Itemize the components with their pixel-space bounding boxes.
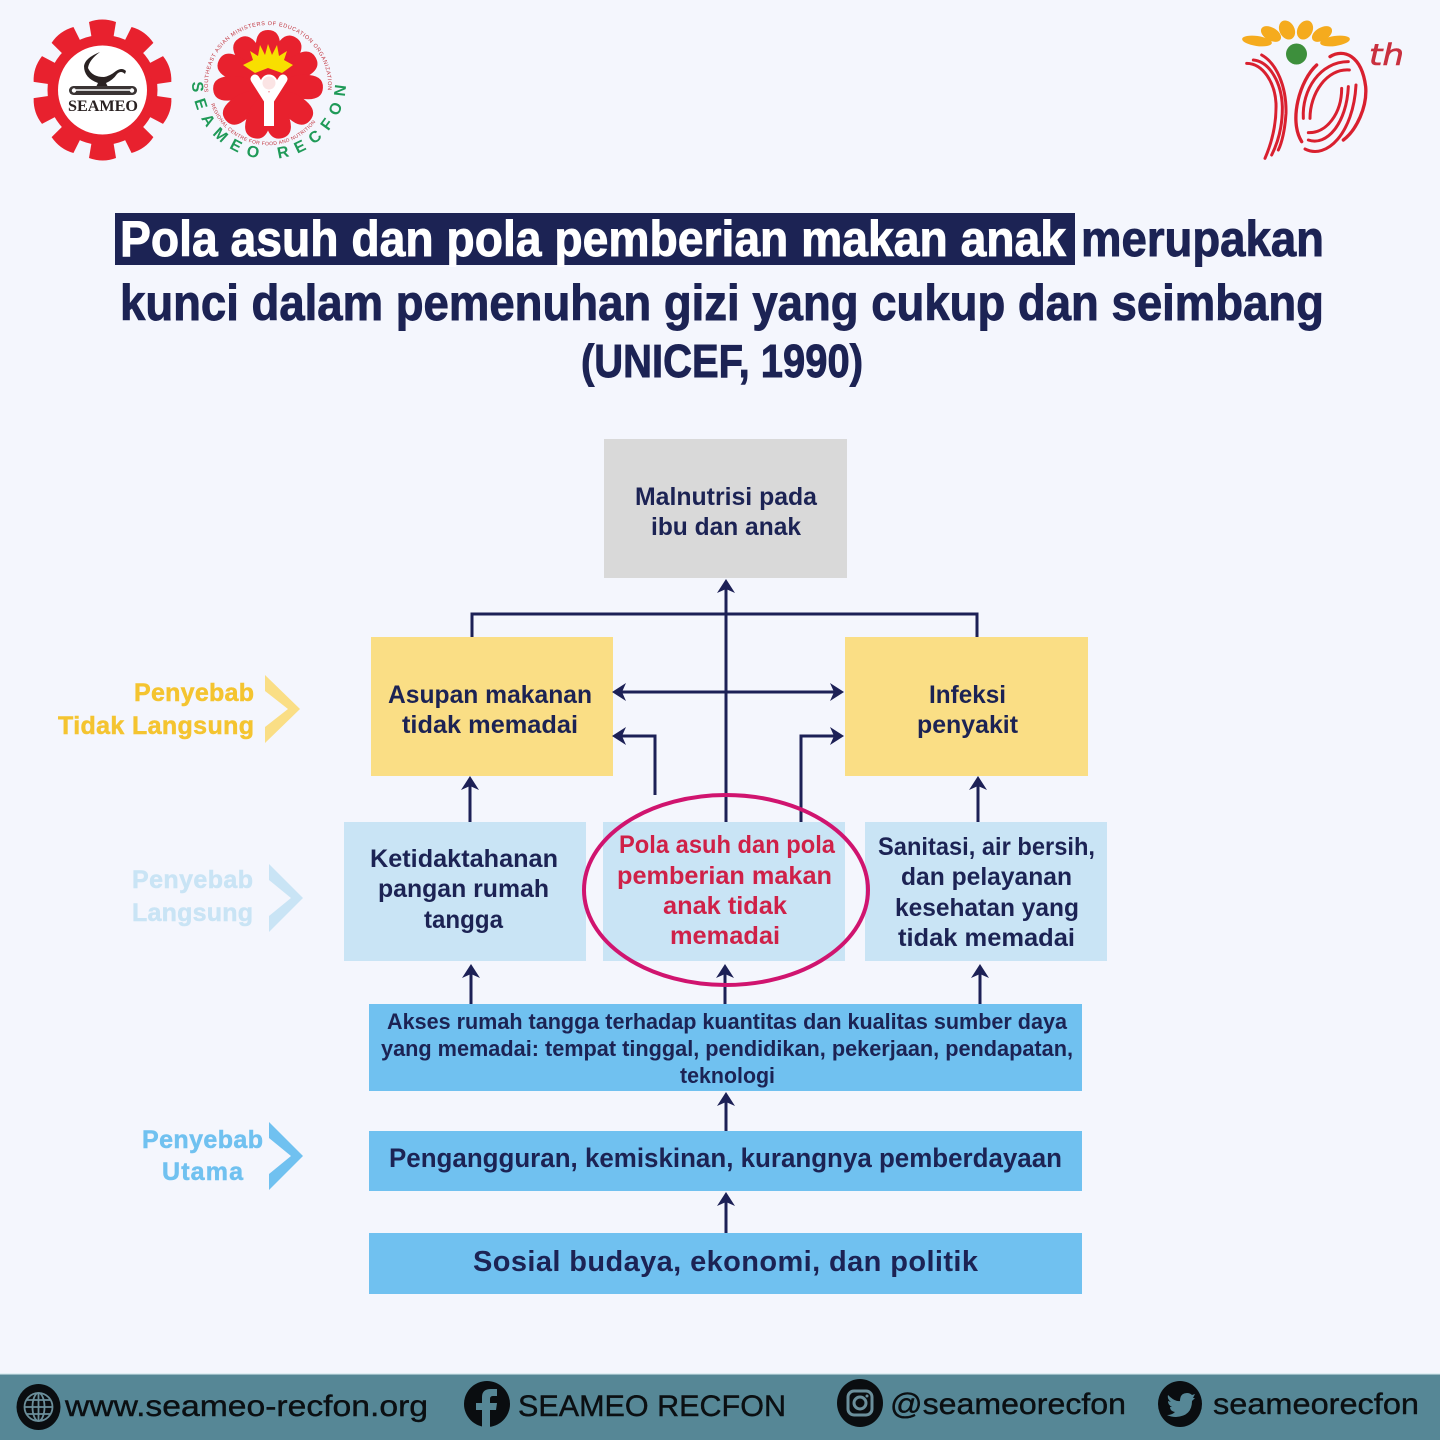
box: unemployment and poverty (369, 1131, 1082, 1191)
box: sanitation: dan pelayanan (901, 863, 1072, 891)
box: parenting and feeding (603, 822, 845, 961)
icon: globe (16, 1384, 60, 1430)
highlight ellipse (584, 795, 868, 985)
box: access to resources: yang memadai: tempat tinggal, pendidikan, pekerjaan, pendapatan, (381, 1036, 1073, 1061)
icon: instagram (837, 1379, 883, 1427)
title: merupakan (1081, 211, 1324, 267)
box: access to resources: Akses rumah tangga terhadap kuantitas dan kualitas sumber daya (387, 1009, 1068, 1034)
label: direct cause: Langsung (132, 899, 253, 927)
icon: twitter (1158, 1381, 1202, 1427)
label: indirect cause: Penyebab (134, 679, 254, 707)
footer bar: seameorecfon (1213, 1388, 1419, 1421)
footer bar: www.seameo-recfon.org (64, 1390, 428, 1423)
box: malnutrition: ibu dan anak (651, 513, 801, 541)
box: socio-cultural, economic, political (369, 1233, 1082, 1294)
box: unemployment and poverty: Pengangguran, kemiskinan, kurangnya pemberdayaan (389, 1143, 1062, 1173)
box: infection: penyakit (917, 711, 1019, 739)
box: household food insecurity (344, 822, 586, 961)
box: inadequate food intake (371, 637, 613, 776)
icon: facebook (464, 1381, 510, 1427)
title: kunci dalam pemenuhan gizi yang cukup dan seimbang (120, 275, 1324, 331)
logo: SEAMEO RECFON flower: SOUTHEAST ASIAN MINISTERS OF EDUCATION ORGANIZATION (204, 21, 332, 92)
logo: SEAMEO RECFON flower: SEAMEO RECFON (192, 82, 346, 158)
box: infection: Infeksi (929, 681, 1006, 709)
title: Pola asuh dan pola pemberian makan anak (120, 211, 1066, 267)
footer bar (0, 1373, 1440, 1440)
footer bar: SEAMEO RECFON (518, 1390, 786, 1423)
label: root cause: Utama (162, 1158, 244, 1186)
box: parenting and feeding: anak tidak (663, 892, 787, 920)
box: sanitation: Sanitasi, air bersih, (878, 833, 1095, 861)
box: inadequate food intake: Asupan makanan (388, 681, 592, 709)
box: malnutrition: Malnutrisi pada (635, 483, 818, 511)
logo: 10th anniversary (1241, 18, 1404, 158)
logo: SEAMEO gear: SEAMEO (68, 98, 138, 115)
arrows and connectors (461, 579, 989, 1233)
box: parenting and feeding: Pola asuh dan pola (619, 831, 836, 859)
box: sanitation (865, 822, 1107, 961)
box: infection (845, 637, 1088, 776)
box: household food insecurity: tangga (424, 906, 504, 934)
title: (UNICEF, 1990) (581, 335, 863, 387)
box: sanitation: tidak memadai (898, 924, 1075, 952)
box: access to resources: teknologi (680, 1063, 775, 1088)
logo: SEAMEO RECFON flower (192, 21, 346, 158)
box: sanitation: kesehatan yang (895, 894, 1079, 922)
box: inadequate food intake: tidak memadai (402, 711, 578, 739)
logo: 10th anniversary: th (1369, 38, 1404, 72)
footer bar: @seameorecfon (890, 1388, 1126, 1421)
label: root cause (142, 1122, 303, 1190)
box: access to resources (369, 1004, 1082, 1091)
box: household food insecurity: pangan rumah (378, 875, 549, 903)
label: indirect cause: Tidak Langsung (58, 712, 254, 740)
box: household food insecurity: Ketidaktahanan (370, 845, 558, 873)
label: direct cause: Penyebab (132, 866, 253, 894)
box: malnutrition (604, 439, 847, 578)
logo: SEAMEO RECFON flower: REGIONAL CENTRE FOR FOOD AND NUTRITION (211, 103, 316, 146)
label: direct cause (132, 864, 303, 932)
box: parenting and feeding: memadai (670, 922, 780, 950)
box: parenting and feeding: pemberian makan (617, 862, 832, 890)
box: socio-cultural, economic, political: Sosial budaya, ekonomi, dan politik (473, 1246, 979, 1278)
label: indirect cause (58, 675, 300, 743)
label: root cause: Penyebab (142, 1126, 263, 1154)
logo: SEAMEO gear (31, 20, 174, 160)
title (115, 211, 1324, 387)
